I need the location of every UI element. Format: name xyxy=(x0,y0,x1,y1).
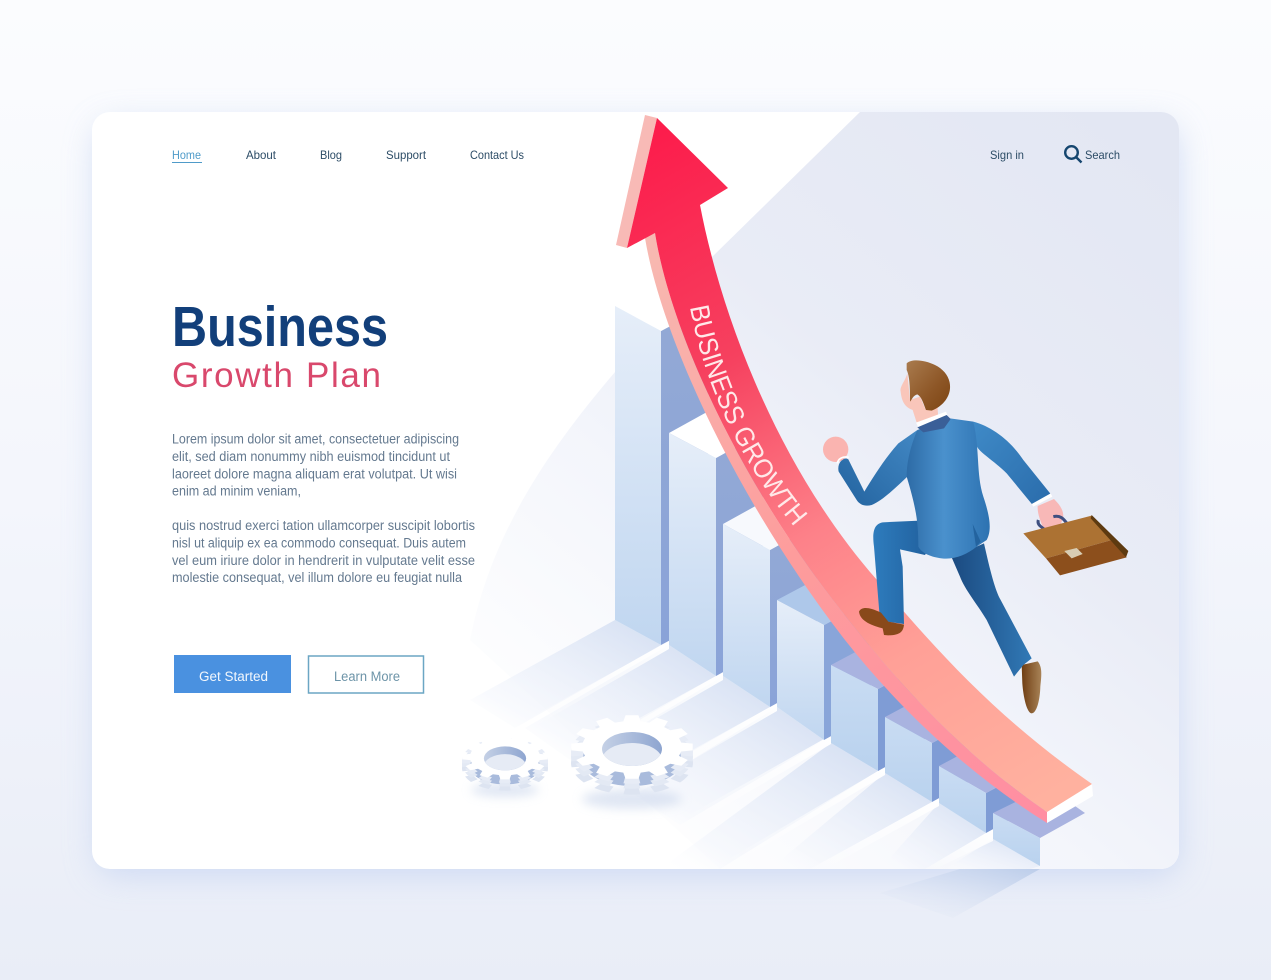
button: get started xyxy=(174,655,291,693)
landing page card xyxy=(92,112,1179,869)
front leg xyxy=(873,521,937,624)
bar 7 xyxy=(939,741,1033,833)
growth arrow: BUSINESS GROWTH xyxy=(690,305,808,526)
button: get started: Get Started xyxy=(199,669,268,684)
shirt collar xyxy=(916,412,948,427)
title line 2: Growth Plan xyxy=(172,356,381,395)
shirt cuff xyxy=(1032,493,1052,507)
body text: laoreet dolore magna aliquam erat volutpat. Ut wisi xyxy=(172,466,457,482)
raised fist xyxy=(823,437,849,463)
briefcase lock xyxy=(1064,548,1083,558)
bar 3 xyxy=(723,498,817,707)
hair xyxy=(907,360,950,411)
body text: Lorem ipsum dolor sit amet, consectetuer adipiscing xyxy=(172,432,459,446)
briefcase xyxy=(1023,515,1128,575)
body text: nisl ut aliquip ex ea commodo consequat. Duis autem xyxy=(172,536,466,550)
body text: quis nostrud exerci tation ullamcorper suscipit lobortis xyxy=(172,518,475,533)
back leg xyxy=(952,543,1032,677)
nav: home: Home xyxy=(172,148,201,162)
large gear shadow xyxy=(582,789,682,809)
nav: about: About xyxy=(246,148,277,162)
briefcase lid xyxy=(1023,516,1112,558)
jacket vent xyxy=(973,524,981,547)
bar 2 xyxy=(669,407,763,676)
front shoe xyxy=(859,608,904,635)
icon: search xyxy=(1065,146,1082,162)
briefcase edge xyxy=(1091,515,1128,557)
hand holding case xyxy=(1038,499,1063,528)
bar 4 xyxy=(777,575,871,740)
jacket collar xyxy=(917,415,951,432)
button: learn more xyxy=(308,656,424,693)
navigation xyxy=(172,146,1120,162)
arrow label xyxy=(690,307,797,530)
nav: search: Search xyxy=(1085,148,1120,162)
far arm xyxy=(838,430,917,506)
body text: vel eum iriure dolor in hendrerit in vulputate velit esse xyxy=(172,553,475,568)
large gear xyxy=(571,715,693,792)
gears xyxy=(462,715,693,809)
card shadow xyxy=(96,124,1179,876)
title line 1: Business xyxy=(172,295,388,359)
nav: contact us: Contact Us xyxy=(470,148,524,162)
bar 8 xyxy=(993,790,1085,866)
near arm xyxy=(973,422,1051,505)
body text xyxy=(172,432,475,585)
small gear xyxy=(462,735,548,788)
bar chart xyxy=(615,281,1085,866)
briefcase front xyxy=(1046,540,1127,575)
arrow end face xyxy=(1047,784,1093,823)
arrow top face xyxy=(627,118,1092,812)
floor shading and stripes xyxy=(470,620,1040,869)
small gear shadow xyxy=(471,783,539,797)
illustration background panel xyxy=(470,112,1179,869)
growth arrow xyxy=(616,115,1093,823)
body text: elit, sed diam nonummy nibh euismod tincidunt ut xyxy=(172,449,450,464)
neck and face xyxy=(900,373,938,424)
bar 1 xyxy=(615,281,708,645)
bar 5 xyxy=(831,640,925,771)
title xyxy=(172,295,388,395)
button: learn more: Learn More xyxy=(334,669,400,684)
businessman xyxy=(823,360,1128,713)
back shoe xyxy=(1014,661,1041,713)
bar 6 xyxy=(885,692,979,802)
arrow side edge xyxy=(645,233,1047,823)
cast shadow below chart xyxy=(880,869,1040,918)
body text: molestie consequat, vel illum dolore eu feugiat nulla xyxy=(172,570,462,585)
nav: support: Support xyxy=(386,148,427,162)
jacket xyxy=(907,418,990,559)
arrowhead side edge xyxy=(616,115,657,248)
nav: blog: Blog xyxy=(320,148,342,162)
body text: enim ad minim veniam, xyxy=(172,484,301,498)
nav: sign in: Sign in xyxy=(990,148,1024,162)
briefcase handle xyxy=(1038,516,1071,531)
